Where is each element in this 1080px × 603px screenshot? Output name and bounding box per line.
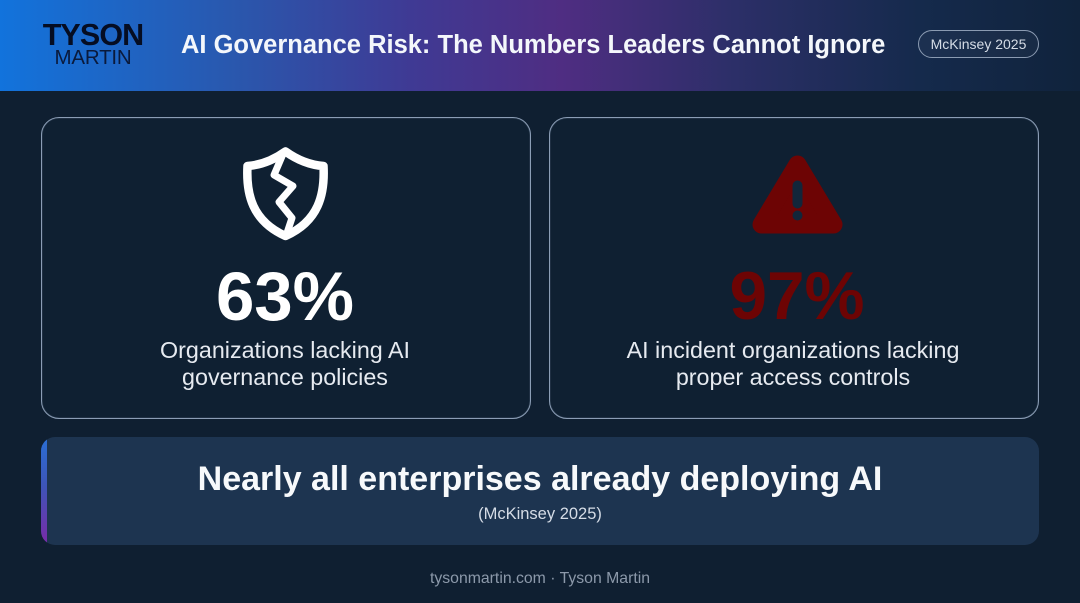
icon: warning triangle bbox=[752, 156, 842, 234]
source note: (McKinsey 2025) bbox=[478, 505, 602, 523]
statistic: 97%: 97% bbox=[729, 259, 865, 334]
panel: incident statistic bbox=[549, 117, 1039, 419]
source badge: McKinsey 2025 bbox=[931, 36, 1026, 52]
accent bar bbox=[41, 437, 47, 545]
takeaway text: Nearly all enterprises already deploying AI bbox=[198, 460, 882, 498]
logo bbox=[43, 18, 143, 69]
description: governance policies bbox=[182, 364, 388, 390]
statistic: 63%: 63% bbox=[216, 258, 354, 335]
footer: tysonmartin.com · Tyson Martin bbox=[430, 570, 650, 587]
panel: key takeaway banner bbox=[41, 437, 1039, 545]
description: proper access controls bbox=[676, 364, 910, 390]
header band bbox=[0, 0, 1080, 91]
description bbox=[626, 337, 959, 390]
description: Organizations lacking AI bbox=[160, 337, 410, 363]
description bbox=[160, 337, 410, 390]
logo: MARTIN bbox=[54, 46, 132, 69]
title: AI Governance Risk: The Numbers Leaders Cannot Ignore bbox=[181, 31, 885, 59]
source badge bbox=[918, 30, 1039, 58]
icon: cracked shield bbox=[243, 147, 328, 240]
logo: TYSON bbox=[43, 18, 143, 52]
description: AI incident organizations lacking bbox=[627, 337, 959, 363]
panel: governance statistic bbox=[41, 117, 531, 419]
